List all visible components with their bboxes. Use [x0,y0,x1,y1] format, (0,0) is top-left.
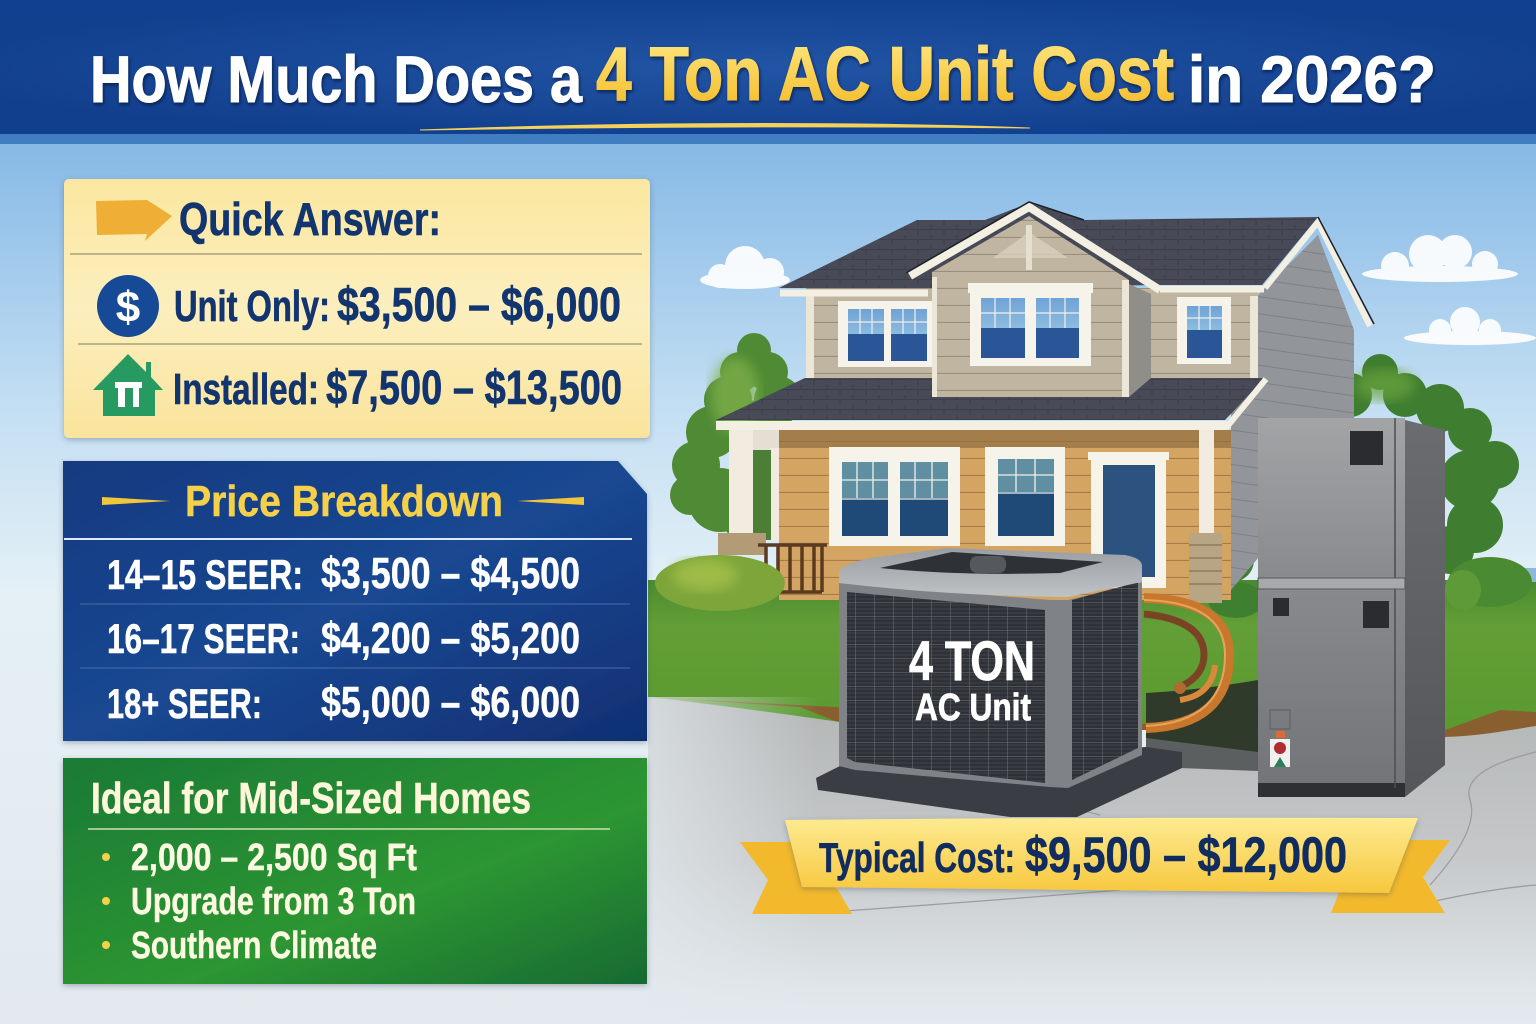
rows: 16–17 SEER: [107,615,300,662]
installed price: $7,500 – $13,500 [326,362,622,415]
bullet list: Southern Climate [131,925,377,967]
left tree [670,333,802,542]
upper windows [838,283,1231,367]
title text [90,32,1436,117]
installed price [173,362,622,415]
rows: 14–15 SEER: [107,551,303,598]
unit label [909,629,1035,729]
rows: $4,200 – $5,200 [321,614,580,663]
panel: quick answer [64,179,650,438]
icon: arrow [96,200,172,241]
pad behind unit [1146,680,1258,771]
illustration: condenser [816,548,1182,817]
lawn and driveway [648,568,1536,1024]
unit only price [174,279,621,332]
clouds [700,235,1536,345]
unit label: 4 TON [909,629,1035,692]
panel: ideal for mid-sized homes [63,758,647,984]
upper storey [806,288,1258,380]
heading: Ideal for Mid-Sized Homes [91,774,531,823]
rows: $3,500 – $4,500 [321,549,580,598]
rows: 18+ SEER: [107,680,262,727]
railing [758,545,827,592]
illustration: house [716,202,1374,603]
front gable [906,202,1160,397]
title text: 4 Ton AC Unit Cost [596,32,1174,117]
rows [107,549,580,727]
icon: dollar: $ [116,283,140,332]
title banner [0,0,1536,144]
ribbon text [819,827,1347,883]
unit only price: Unit Only: [174,282,330,331]
bullet list: Upgrade from 3 Ton [131,881,416,923]
bush left [655,555,785,611]
rows: $5,000 – $6,000 [321,678,580,727]
unit only price: $3,500 – $6,000 [337,279,621,332]
ribbon: typical cost [740,818,1450,914]
shrubs [1448,557,1532,607]
ribbon text: $9,500 – $12,000 [1025,827,1347,883]
trees and shrubs [670,333,1532,618]
front door [1103,465,1155,577]
icon: green house [93,354,163,416]
heading: price breakdown: Price Breakdown [185,477,503,526]
copper lines [1144,598,1229,728]
side wall [1231,235,1354,590]
panel: price breakdown [63,461,647,741]
unit label: AC Unit [915,687,1031,729]
icon: dollar [97,275,159,337]
title text: in 2026? [1188,42,1436,116]
lower storey [779,430,1231,600]
bullet list [102,837,417,967]
porch roof [716,378,1265,420]
ribbon text: Typical Cost: [819,834,1015,881]
right tree [1210,354,1519,582]
heading: quick answer: Quick Answer: [179,193,441,245]
title text: How Much Does a [90,42,583,116]
installed price: Installed: [173,365,319,414]
main roof [779,203,1318,288]
bullet list: 2,000 – 2,500 Sq Ft [131,837,417,879]
columns [729,430,753,533]
lower windows [829,447,1169,588]
illustration: air handler [1258,418,1445,797]
